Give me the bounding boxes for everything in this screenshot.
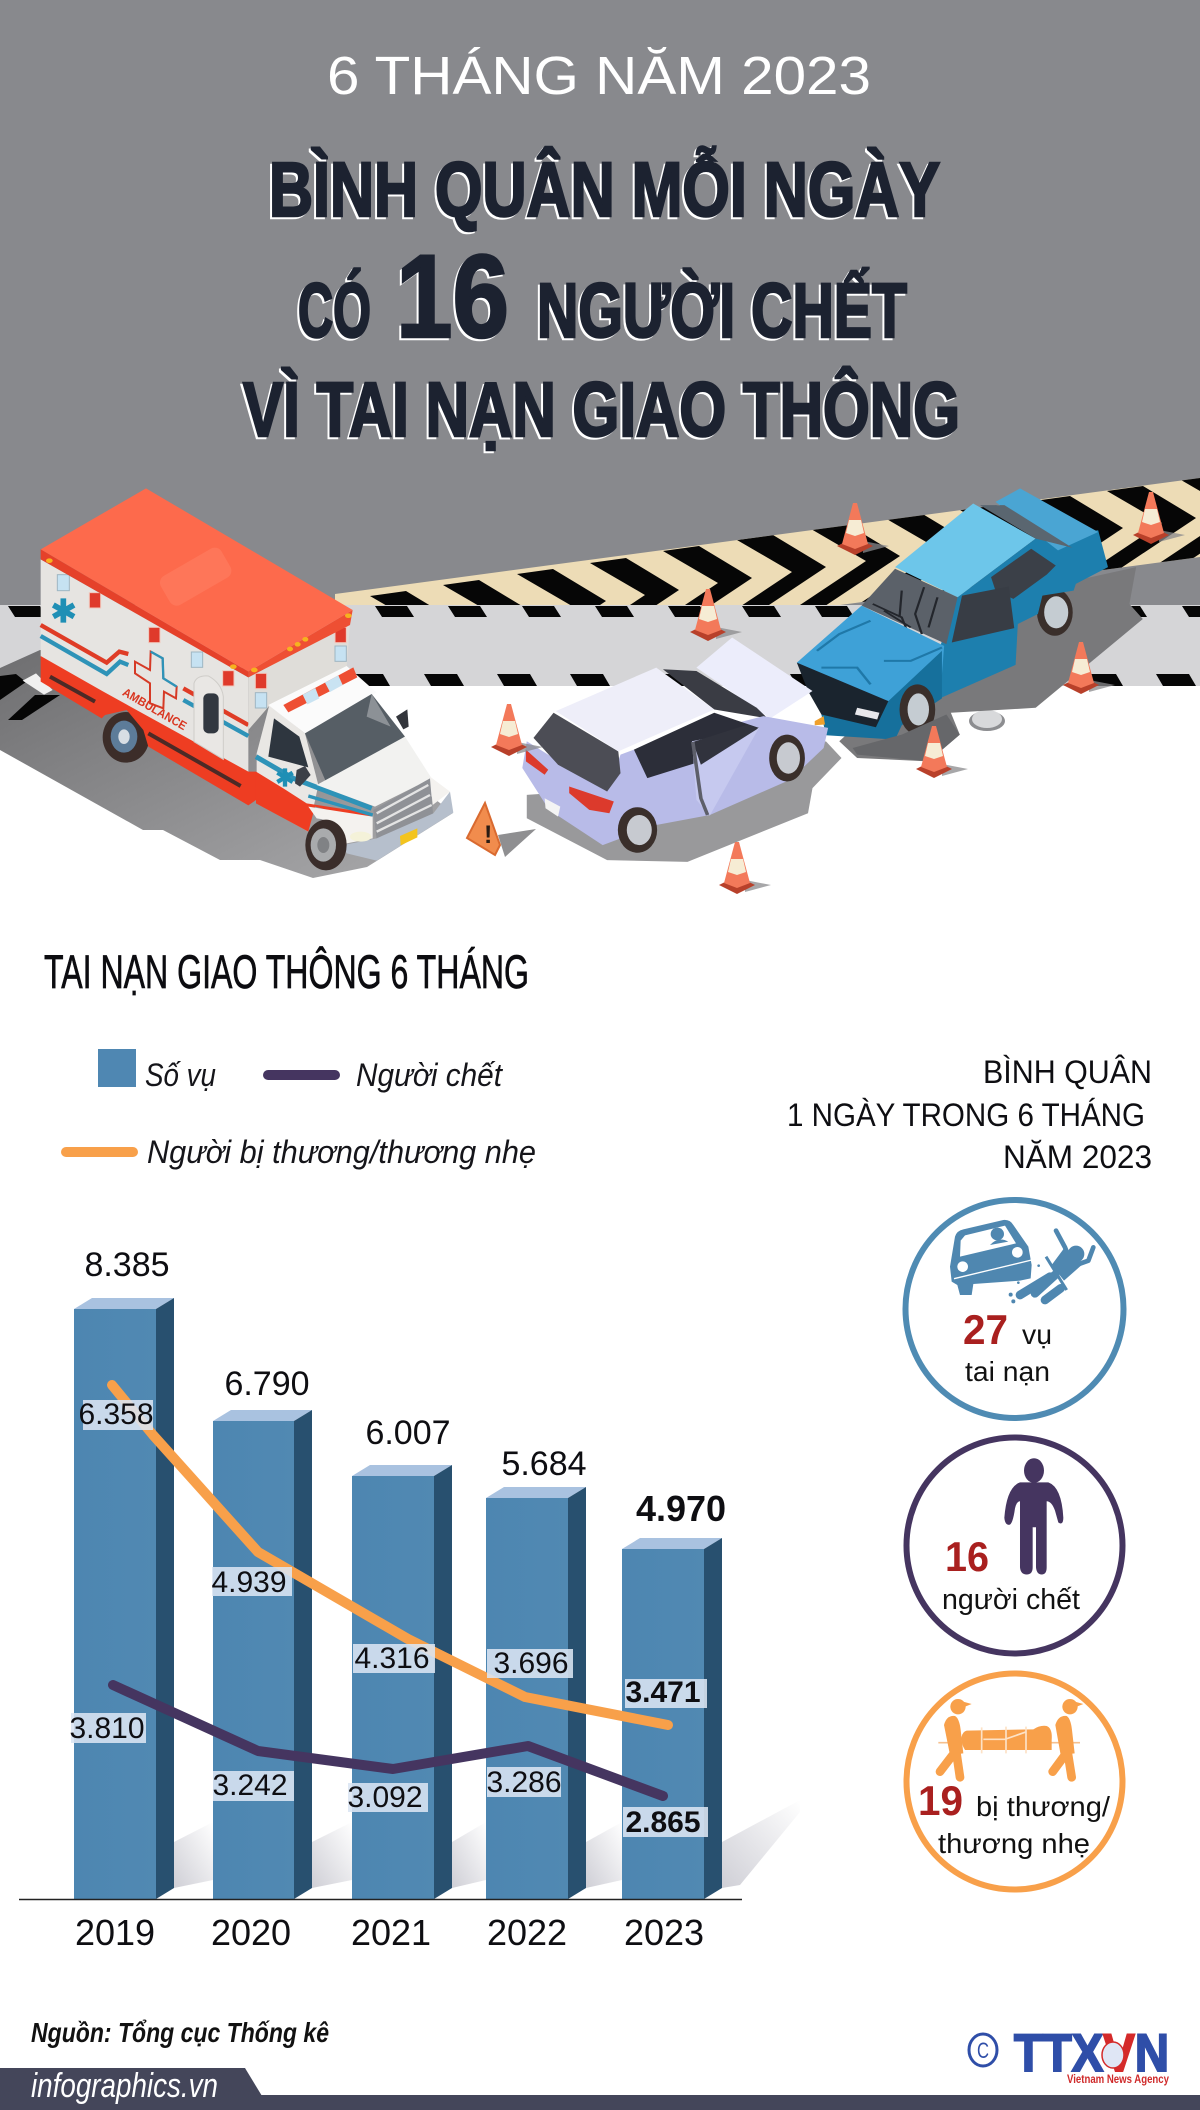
license plate (545, 798, 560, 817)
label: thương nhẹ: thương nhẹ (938, 1828, 1090, 1859)
icon: person (1004, 1458, 1063, 1574)
blue car shadow (839, 567, 1143, 761)
total 2023: 4.970 (636, 1488, 726, 1529)
cab red panel (256, 772, 372, 832)
door window (203, 693, 219, 733)
ambulance lettering: AMBULANCE (120, 685, 189, 733)
circle outline (906, 1674, 1122, 1890)
year 2022: 2022 (487, 1912, 567, 1953)
rear wheel (103, 712, 149, 763)
chart heading: TAI NẠN GIAO THÔNG 6 THÁNG (44, 945, 529, 998)
front indicator (815, 716, 825, 725)
footer url: infographics.vn (31, 2067, 218, 2105)
legend label: người chết: Người chết (356, 1057, 503, 1093)
light bar (283, 667, 357, 712)
copyright mark: C (977, 2038, 989, 2063)
year 2020: 2020 (211, 1912, 291, 1953)
total 2021: 6.007 (365, 1414, 451, 1452)
title line 2: number 16: 16 (396, 231, 509, 363)
white roof (556, 668, 714, 751)
white car (522, 637, 828, 853)
car body (950, 1220, 1032, 1295)
panel: deaths per day (906, 1438, 1122, 1654)
axis line (19, 1898, 742, 1900)
2021 deaths: 3.092 (347, 1781, 423, 1814)
white car windshield (663, 669, 768, 718)
legend line: người chết (268, 1070, 335, 1080)
2019 injured: 6.358 (78, 1398, 154, 1431)
TTXVN logo (969, 2024, 1169, 2086)
blue front grille (797, 663, 888, 727)
box front (248, 624, 350, 730)
stat: 19: 19 (918, 1777, 963, 1824)
marker lights blue (57, 575, 346, 708)
right fender (430, 777, 450, 805)
blue roof (895, 503, 1036, 597)
year 2019: 2019 (75, 1912, 155, 1953)
white car and blue car (522, 488, 1143, 862)
2020 injured: 4.939 (211, 1566, 287, 1599)
year 2021: 2021 (351, 1912, 431, 1953)
rear wheel (618, 807, 657, 853)
warning triangle (467, 803, 536, 857)
headlight (350, 832, 371, 842)
legend swatch: số vụ (98, 1049, 136, 1087)
label backgrounds (71, 1713, 708, 1837)
road dashes (0, 606, 1200, 686)
grille lines (377, 785, 432, 832)
bumper (343, 792, 453, 861)
2022 deaths: 3.286 (486, 1766, 562, 1799)
icon: stretcher carriers (938, 1699, 1083, 1777)
car window (960, 1226, 1016, 1257)
footer tab (0, 2068, 262, 2096)
light bar segment (325, 675, 343, 692)
2019 deaths: 3.810 (69, 1712, 145, 1745)
rider head (1068, 1246, 1084, 1262)
cab mirror (295, 766, 311, 787)
bar 2023 (622, 1538, 722, 1899)
right carrier head (1062, 1699, 1078, 1714)
windshield reflection (367, 694, 391, 727)
blue hood (797, 606, 944, 701)
title line 2: có: CÓ (298, 268, 371, 354)
traffic cone 2 (1133, 492, 1185, 544)
front wheel (305, 820, 347, 870)
front wheel (769, 735, 805, 781)
footer band (0, 2095, 1200, 2110)
box side (41, 559, 248, 774)
rear side window (991, 549, 1056, 599)
star of life rear (53, 598, 74, 623)
legend label: bị thương: Người bị thương/thương nhẹ (147, 1134, 536, 1170)
bar totals (84, 1246, 726, 1529)
heading: period: 6 THÁNG NĂM 2023 (327, 46, 871, 106)
roof edge side (41, 549, 248, 677)
rear step (23, 673, 53, 695)
stretcher straps (982, 1727, 1027, 1753)
2023 injured: 3.471 (625, 1676, 701, 1709)
driver (991, 1228, 1004, 1240)
logo wordmark: TTXVN (1014, 2024, 1169, 2083)
windshield cracked (862, 569, 958, 644)
tail light (569, 786, 614, 813)
grille (373, 778, 433, 840)
cab side (257, 705, 318, 832)
roof edge front (248, 610, 353, 677)
stretcher patient (961, 1726, 1052, 1750)
source note: Nguồn: Tổng cục Thống kê (31, 2017, 329, 2048)
label: vụ: vụ (1022, 1319, 1052, 1350)
cab window (268, 718, 308, 767)
fender stripe (308, 796, 373, 815)
traffic cone 4 (1063, 642, 1115, 694)
title line 1: BÌNH QUÂN MỖI NGÀY (269, 146, 940, 233)
total 2020: 6.790 (224, 1365, 310, 1403)
marker lights red (89, 593, 346, 689)
label: bị thương: bị thương/ (976, 1791, 1110, 1822)
box stripes (41, 625, 128, 663)
hood creases (817, 621, 942, 684)
box roof (41, 488, 353, 672)
box red skirt (41, 656, 256, 805)
person head (1024, 1458, 1044, 1483)
person body (1004, 1482, 1063, 1574)
blue car side (940, 530, 1108, 698)
hood (317, 737, 432, 807)
handlebar (1046, 1257, 1067, 1290)
blue car trunk (996, 488, 1098, 550)
amber lights (46, 558, 352, 672)
left carrier head (950, 1699, 966, 1714)
open door (692, 728, 759, 816)
red cross outline (135, 652, 177, 708)
windshield (305, 694, 405, 783)
rear window (533, 713, 621, 792)
title line 2: người chết: NGƯỜI CHẾT (537, 267, 907, 354)
traffic cone 6 (719, 842, 771, 894)
barrier piece left (8, 695, 60, 720)
traffic cone 7 (491, 704, 543, 756)
background: grey header (0, 0, 1200, 606)
cab roof (268, 666, 377, 733)
circle outline (906, 1438, 1122, 1654)
triangle body (467, 803, 500, 855)
bar 2020 (213, 1410, 312, 1899)
stat: 27: 27 (963, 1306, 1008, 1353)
door edge (693, 742, 708, 815)
wheel cap (969, 710, 1005, 731)
line: bị thương (112, 1385, 668, 1725)
bar 2021 (352, 1465, 452, 1899)
2021 injured: 4.316 (354, 1642, 430, 1675)
title line 3: VÌ TAI NẠN GIAO THÔNG (243, 366, 960, 453)
right carrier torso (1055, 1716, 1075, 1755)
debris (1009, 1264, 1040, 1303)
copyright mark (969, 2034, 997, 2066)
legend (66, 1049, 536, 1170)
box stripe blue (41, 636, 128, 674)
heading line 2: 1 NGÀY TRONG 6 THÁNG (787, 1097, 1145, 1133)
2022 injured: 3.696 (493, 1647, 569, 1680)
traffic cone 1 (837, 503, 889, 555)
logo globe (1102, 2042, 1124, 2068)
front wheel (900, 684, 935, 735)
bar 2019 (74, 1298, 174, 1899)
rear door (194, 676, 223, 759)
legend line: bị thương (66, 1147, 133, 1157)
rear window (980, 505, 1072, 548)
bar shadows (174, 1800, 800, 1888)
roof hatch (157, 545, 234, 609)
label: người chết: người chết (942, 1584, 1080, 1616)
2023 deaths: 2.865 (625, 1806, 701, 1839)
blue car (797, 488, 1108, 761)
stripes behind door (183, 688, 248, 725)
bar and line chart (19, 1246, 800, 1953)
side window (634, 713, 759, 778)
traffic cone 5 (916, 726, 968, 778)
circle outline (906, 1200, 1124, 1418)
tail light left (526, 750, 548, 775)
dark barrier piece under shadow (0, 674, 26, 700)
front side window (952, 587, 1014, 642)
car bumper line (954, 1260, 1032, 1279)
line: người chết (113, 1685, 663, 1796)
deaths value labels (69, 1712, 708, 1839)
driver shoulders (990, 1239, 1008, 1245)
x axis years (75, 1912, 704, 1953)
footer bar (0, 2067, 1200, 2110)
motorbike (1020, 1275, 1061, 1300)
total 2022: 5.684 (501, 1445, 587, 1483)
year 2023: 2023 (624, 1912, 704, 1953)
label: tai nạn: tai nạn (965, 1356, 1050, 1387)
white car hood (696, 637, 812, 718)
panel: injured per day (906, 1674, 1122, 1890)
left carrier legs (940, 1750, 960, 1777)
rider torso (1052, 1248, 1082, 1281)
exclamation mark: ! (484, 821, 492, 849)
injured value labels (78, 1398, 707, 1709)
rear wheel (1037, 589, 1073, 636)
stripes blue behind door (183, 700, 248, 736)
blue headlight (855, 708, 879, 720)
icon: car hitting motorbike (950, 1220, 1093, 1303)
blue lower body (821, 651, 942, 740)
ambulance shadow (0, 650, 453, 878)
logo tagline: Vietnam News Agency (1067, 2072, 1169, 2086)
car headlights (957, 1247, 1023, 1272)
stretcher pole (938, 1740, 1080, 1745)
panel: accidents per day (906, 1200, 1124, 1418)
road band (0, 605, 1200, 686)
white car body (522, 716, 828, 845)
cross blue edge (151, 652, 177, 687)
triangle shadow (498, 829, 536, 857)
main title (243, 146, 960, 453)
2020 deaths: 3.242 (212, 1769, 288, 1802)
white car shadow (527, 741, 841, 862)
bar 2022 (486, 1487, 586, 1899)
heading line 3: NĂM 2023 (1003, 1139, 1152, 1175)
heading line 1: BÌNH QUÂN (983, 1054, 1152, 1090)
license plate (400, 828, 417, 845)
left carrier torso (944, 1716, 963, 1755)
traffic cone 3 (690, 589, 742, 641)
rider limbs (1056, 1231, 1093, 1266)
oil stain (853, 714, 960, 761)
windshield cracks (873, 587, 937, 634)
right carrier legs (1053, 1750, 1072, 1777)
cab blue stripe (256, 757, 372, 808)
legend label: số vụ: Số vụ (145, 1057, 216, 1093)
right carrier cap (1067, 1699, 1083, 1708)
chevron barrier (335, 478, 1200, 605)
cab star of life (277, 768, 293, 787)
fender (308, 807, 373, 843)
total 2019: 8.385 (84, 1246, 170, 1284)
label backgrounds (83, 1400, 707, 1708)
stat: 16: 16 (945, 1533, 989, 1580)
left carrier cap (955, 1699, 972, 1708)
daily average heading (787, 1054, 1152, 1175)
side mirror right (396, 709, 409, 729)
skirt dark bars (50, 677, 241, 786)
ambulance (23, 488, 453, 870)
light bar blue segment (303, 688, 319, 704)
accident scene illustration (0, 460, 1200, 894)
door window (693, 725, 758, 765)
